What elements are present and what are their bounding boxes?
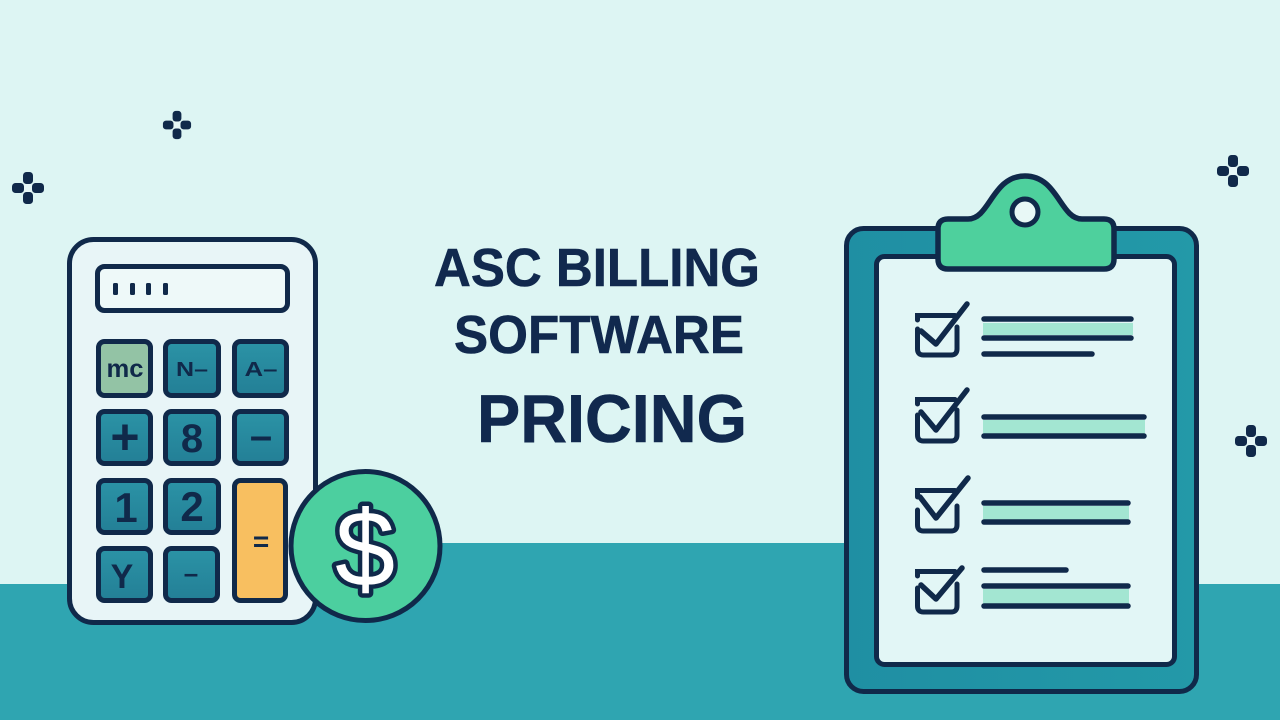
- checklist item 4: [918, 568, 1129, 612]
- calculator key labels: =: [253, 526, 269, 557]
- calculator key labels: mc: [106, 355, 144, 383]
- title: SOFTWARE: [454, 305, 744, 365]
- clipboard paper: [876, 256, 1174, 664]
- calculator key labels: 2: [180, 483, 204, 530]
- icon: dollar coin: $: [335, 488, 395, 609]
- calculator key labels: 8: [181, 417, 203, 461]
- calculator key labels: +: [110, 409, 140, 465]
- calculator display: [98, 266, 288, 310]
- clipboard clip: [938, 176, 1114, 269]
- clipboard board: [846, 228, 1196, 692]
- calculator key labels: N–: [176, 359, 208, 381]
- sparkle top right: [1217, 155, 1249, 187]
- sparkle mid right: [1235, 425, 1267, 457]
- calculator keys: [98, 342, 286, 600]
- teal stepped floor band: [0, 543, 1280, 720]
- calculator key labels: Y: [111, 558, 134, 596]
- calculator key labels: [106, 355, 278, 596]
- checklist item 1: [918, 304, 1133, 355]
- calculator key labels: –: [250, 414, 272, 458]
- title: ASC BILLING: [434, 238, 760, 298]
- title: [434, 238, 760, 457]
- sparkle far left: [12, 172, 44, 204]
- icon: calculator: [70, 240, 316, 622]
- icon: dollar coin: [291, 472, 440, 620]
- calculator key labels: 1: [114, 484, 138, 531]
- checklist item 2: [918, 390, 1145, 441]
- calculator key labels: A–: [244, 359, 278, 381]
- calculator key labels: –: [184, 558, 198, 588]
- checklist item 3: [918, 478, 1129, 531]
- calculator body: [70, 240, 316, 622]
- icon: clipboard: [846, 176, 1196, 692]
- title: PRICING: [477, 381, 747, 457]
- sparkle top left: [163, 111, 191, 139]
